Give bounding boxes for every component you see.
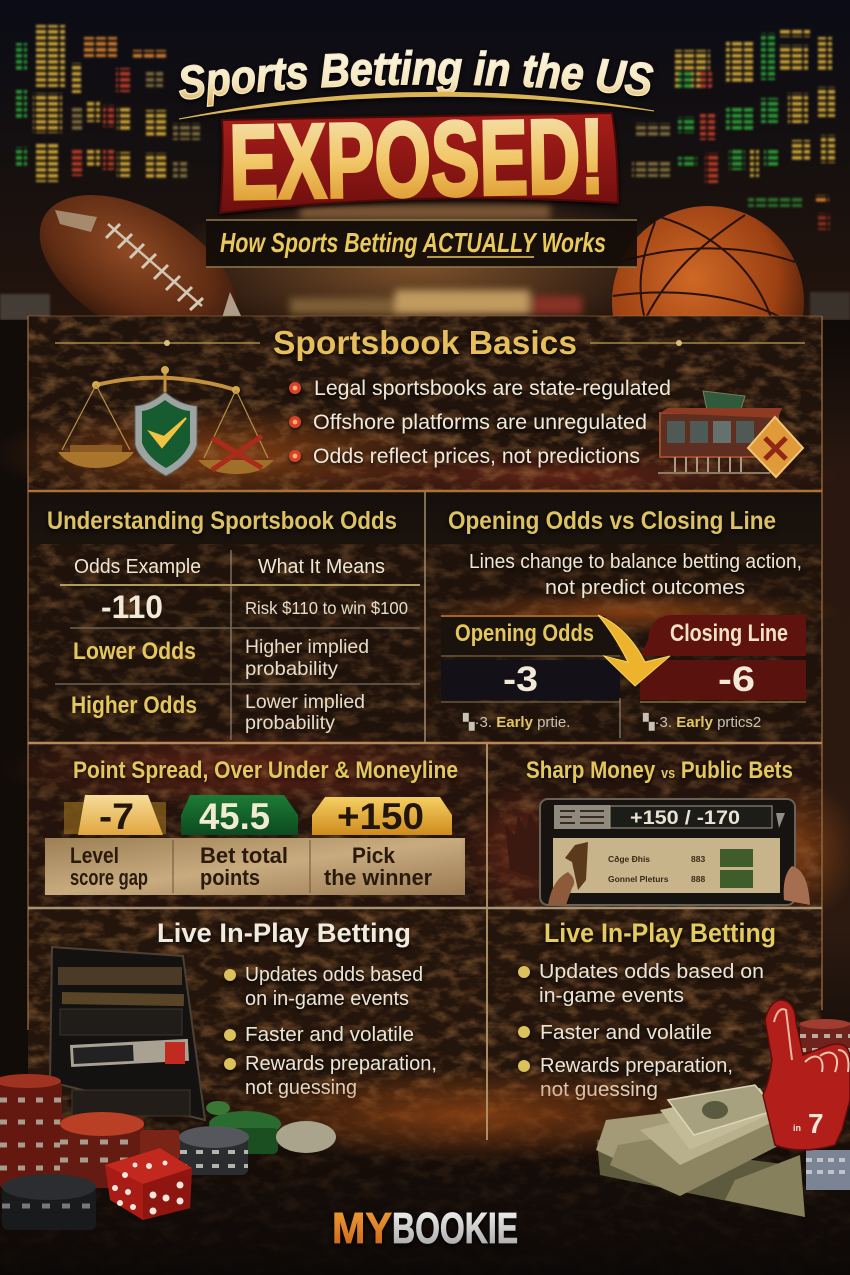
bullets: live left: on in-game events: [245, 988, 409, 1010]
spread chip: -7: [99, 796, 134, 837]
panel: understanding odds: [28, 492, 425, 742]
closing line box: -6: [718, 660, 755, 699]
description: Lines change to balance betting action,: [469, 550, 802, 573]
icon: football: [14, 164, 262, 376]
bullet list: basics: Legal sportsbooks are state-regulated: [314, 376, 671, 400]
paper labels: [45, 838, 465, 895]
paper labels: the winner: [324, 865, 432, 890]
logo: mybookie: BOOKIE: [392, 1204, 518, 1253]
paper labels: points: [200, 865, 260, 890]
icon: foam finger: [763, 1000, 850, 1150]
phone with odds: Gonnel Pleturs: [608, 874, 669, 884]
description: [469, 550, 802, 599]
logo: mybookie: [332, 1204, 518, 1253]
left odds board: [16, 25, 200, 182]
bullets: live left: Faster and volatile: [245, 1024, 414, 1046]
odds table: Higher Odds: [71, 692, 197, 719]
icon: black chip stack: [2, 1174, 96, 1230]
paper labels: score gap: [70, 865, 148, 890]
bullets: live right: in-game events: [539, 985, 684, 1007]
bullets: live left: Rewards preparation,: [245, 1053, 437, 1075]
heading rule right: [590, 342, 805, 344]
paper labels: Bet total: [200, 843, 288, 868]
icon: white chip stack: [806, 1150, 850, 1190]
title: [178, 50, 654, 222]
heading rule left: [55, 342, 260, 344]
odds table: [55, 550, 420, 740]
heading: point spread: Point Spread, Over Under & Moneyline: [73, 757, 458, 784]
opening odds box: Opening Odds: [455, 620, 594, 647]
bullets: live left: not guessing: [245, 1077, 357, 1099]
red banner: [220, 113, 618, 213]
icon: red chip stacks: [0, 1074, 180, 1190]
icon: tablet with live odds: [50, 947, 205, 1120]
paper labels: Pick: [352, 843, 396, 868]
moneyline chip: +150: [337, 796, 424, 837]
bullets: live right: not guessing: [540, 1079, 658, 1101]
odds table: probability: [245, 712, 335, 734]
title line 2: EXPOSED!: [228, 97, 605, 222]
arena backdrop: [0, 0, 850, 320]
icon: basketball: [612, 206, 804, 398]
bullets: live right: Faster and volatile: [540, 1022, 712, 1044]
closing line box: Closing Line: [670, 620, 788, 647]
description: not predict outcomes: [545, 576, 745, 599]
side chip stacks: [0, 292, 850, 320]
moneyline chip: [312, 796, 452, 837]
icon: right chip stack: [800, 1019, 850, 1066]
caption right: ▚·3. Early prtics2: [642, 712, 761, 731]
bullet list: basics: [289, 376, 671, 468]
heading: sharp money: Sharp Money vs Public Bets: [526, 757, 793, 784]
odds table: -110: [101, 589, 163, 625]
caption left: ▚·3. Early prtie.: [462, 712, 570, 731]
title line 1: Sports Betting in the US: [178, 50, 654, 108]
phone with odds: [540, 799, 795, 905]
outer side texture: [0, 320, 850, 1080]
phone with odds: 888: [691, 874, 705, 884]
right odds board: [632, 28, 835, 230]
bullet list: basics: Odds reflect prices, not predictions: [313, 444, 640, 468]
panel frame lines: [28, 316, 822, 1140]
phone with odds: +150 / -170: [630, 808, 740, 829]
odds table: Odds Example: [74, 556, 201, 578]
panel: point spread: [0, 730, 500, 908]
icon: crowd silhouette: [505, 812, 545, 880]
total chip: [181, 795, 298, 837]
opening odds box: [441, 616, 620, 702]
arrow: opening to closing: [598, 615, 670, 686]
panel: live betting left: [28, 908, 487, 1100]
title swoosh: [179, 92, 654, 119]
table items: [290, 205, 582, 314]
icon: green and white chips: [206, 1101, 336, 1154]
bullets: live left: [224, 964, 437, 1099]
closing line box: [640, 615, 806, 702]
odds table: Higher implied: [245, 636, 369, 658]
heading: understanding odds: Understanding Sportsbook Odds: [47, 507, 397, 535]
panel: live betting right: [487, 908, 822, 1101]
odds table: Lower implied: [245, 691, 365, 713]
odds table: Risk $110 to win $100: [245, 598, 408, 618]
bullets: live right: Updates odds based on: [539, 961, 764, 983]
icon: cash pile: [596, 1085, 805, 1217]
table glow: [160, 185, 680, 345]
icon: foam finger: in: [793, 1123, 801, 1133]
icon: red dice: [105, 1148, 192, 1220]
heading: live betting left: Live In-Play Betting: [157, 918, 411, 948]
panel: sportsbook basics: [0, 316, 840, 507]
panel: opening vs closing: [420, 492, 840, 742]
panel: sharp money: [460, 744, 850, 925]
header scene: [0, 0, 850, 320]
logo: mybookie: MY: [332, 1204, 392, 1253]
subtitle: How Sports Betting ACTUALLY Works: [220, 227, 606, 258]
floor fade: [0, 1100, 850, 1275]
icon: dark chip stack: [179, 1126, 249, 1175]
bullets: live right: [518, 961, 764, 1101]
subtitle band: [206, 220, 637, 267]
paper labels: Level: [70, 843, 119, 868]
divider: [619, 698, 621, 738]
phone with odds: 883: [691, 854, 705, 864]
odds table: probability: [245, 658, 338, 680]
heading: sportsbook basics: Sportsbook Basics: [273, 324, 577, 361]
bullets: live left: Updates odds based: [245, 964, 423, 986]
icon: offshore building with warning: [658, 391, 803, 477]
phone with odds: Cðge Ðhis: [608, 854, 650, 864]
spread chip: [64, 795, 166, 837]
icon: foam finger: 7: [808, 1108, 824, 1139]
bullet list: basics: Offshore platforms are unregulated: [313, 410, 647, 434]
heading: opening vs closing: Opening Odds vs Closing Line: [448, 507, 776, 535]
odds table: Lower Odds: [73, 638, 196, 665]
heading: live betting right: Live In-Play Betting: [544, 918, 776, 948]
bullets: live right: Rewards preparation,: [540, 1055, 733, 1077]
total chip: 45.5: [199, 796, 270, 837]
opening odds box: -3: [503, 660, 538, 699]
icon: hands holding phone: [548, 866, 810, 905]
framed content panels: [0, 316, 850, 1275]
odds table: What It Means: [258, 556, 385, 578]
floor glow: [200, 1067, 740, 1163]
icon: balance scale with shield: [58, 366, 274, 476]
